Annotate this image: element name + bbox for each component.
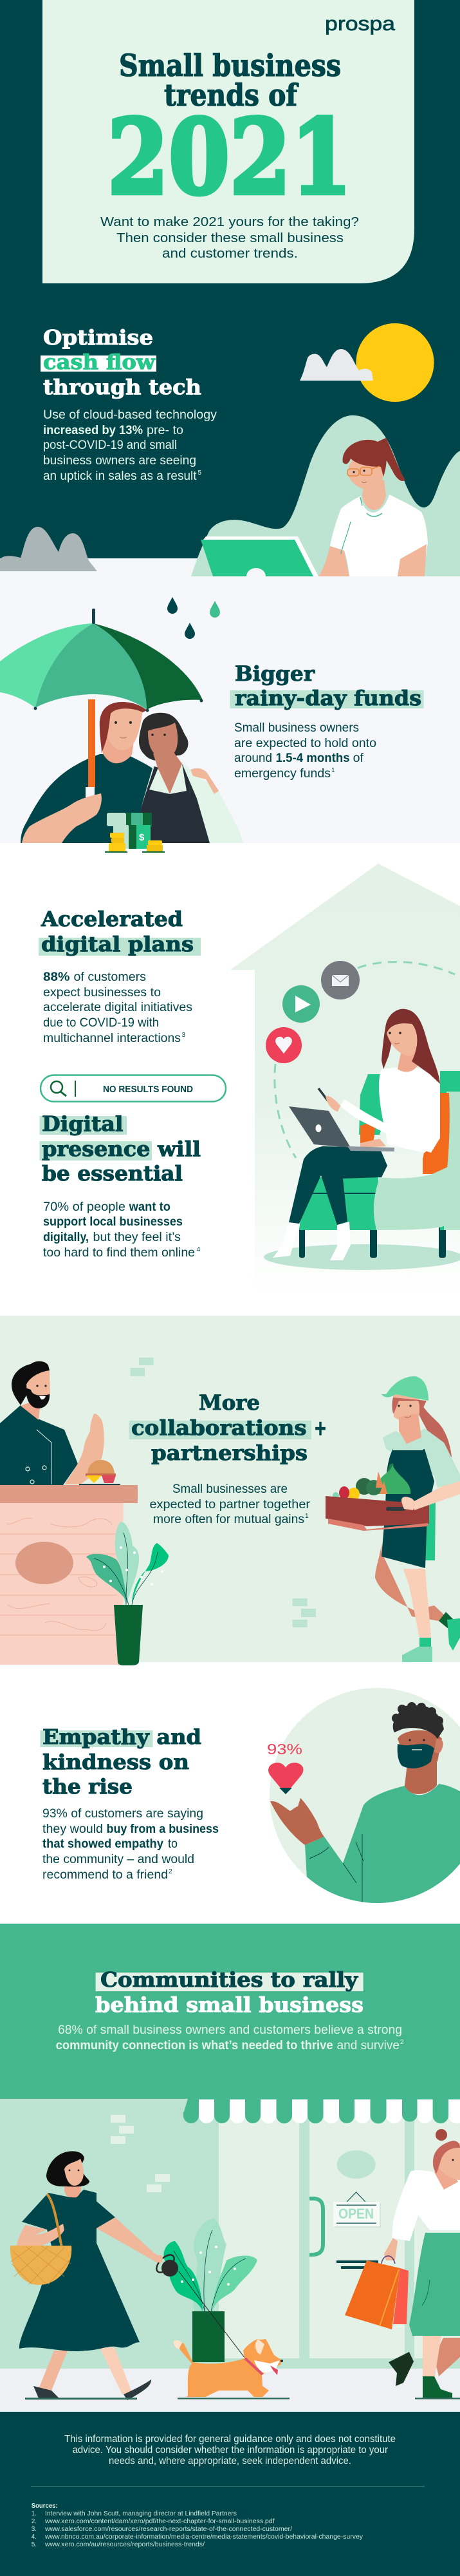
disclaimer: This information is provided for general guidance only and does not constitute: [64, 2434, 396, 2445]
floor: [0, 558, 199, 576]
heading: behind small business: [95, 1993, 363, 2017]
illustration: counter: [0, 1485, 138, 1665]
heading: accelerated digital plans: [39, 907, 201, 956]
illustration: woman on armchair: [264, 1009, 460, 1270]
heading: accelerated digital plans: Accelerated: [41, 907, 183, 931]
panel: empathy: [40, 1688, 460, 1913]
logo: prospa: prospa: [325, 12, 396, 35]
body text: an uptick in sales as a result: [43, 469, 197, 483]
decorative bricks: [111, 2115, 170, 2192]
sources: 3.: [32, 2526, 37, 2533]
body text: 70%: 4: [197, 1246, 201, 1253]
body text: 5: [198, 469, 202, 477]
body text: business owners are seeing: [43, 454, 196, 468]
panel: hero: [0, 0, 460, 576]
panel: digital plans: [39, 864, 460, 1294]
body text: and survive: [337, 2039, 400, 2052]
illustration: umbrella and couple: [0, 609, 243, 853]
sign: open: OPEN: [338, 2206, 374, 2222]
body text: 68% of small business owners and customers believe a strong: [58, 2023, 402, 2037]
heading: Bigger: [235, 661, 315, 686]
heading: More: [199, 1390, 260, 1415]
stat: 93%: 93%: [267, 1741, 302, 1757]
body text: 1: [331, 767, 335, 774]
body text: around: [234, 752, 272, 765]
body text: 1.5-4 months: [276, 752, 350, 765]
body text: emergency funds: [234, 767, 331, 781]
heading: collaborations: [131, 1416, 306, 1440]
sources: www.nbnco.com.au/corporate-information/media-centre/media-statements/covid-behavioral-change-survey: [44, 2533, 363, 2541]
illustration: pot plant: [86, 1522, 169, 1665]
body text: 88%: expect businesses to: [43, 986, 161, 999]
body text: community connection is what’s needed to thrive: [56, 2039, 333, 2052]
heading: cash flow: [43, 350, 156, 374]
panel: communities: [0, 1924, 460, 2099]
body text: the community – and would: [42, 1853, 194, 1866]
heading: digital presence: [40, 1112, 201, 1186]
panel: collaborations: [0, 1316, 460, 1665]
body text: 88%: multichannel interactions: [43, 1032, 181, 1045]
sources: Interview with John Scutt, managing director at Lindfield Partners: [45, 2510, 237, 2517]
body text: [234, 721, 376, 781]
body text: they would: [42, 1823, 103, 1836]
icon: play: [282, 985, 320, 1023]
body text: buy from a business: [107, 1823, 219, 1836]
rain drops: [167, 597, 220, 639]
panel: cash flow: [0, 323, 460, 585]
house shape: [230, 864, 460, 1294]
body text: 70%: support local businesses: [43, 1215, 183, 1229]
illustration: woman walking dog: [10, 2151, 290, 2400]
body text: pre- to: [147, 424, 183, 437]
body text: post-COVID-19 and small: [43, 439, 177, 452]
disclaimer: [64, 2434, 396, 2467]
heading: Empathy and: [42, 1725, 201, 1749]
year: 2021: 2021: [107, 97, 352, 218]
door panels: [219, 2112, 460, 2358]
body text: 70%: but they feel it’s: [93, 1231, 181, 1244]
body text: 88%: [43, 971, 192, 1045]
illustration: chef: [0, 1361, 120, 1486]
sources: 1.: [32, 2510, 37, 2517]
icon: heart with tip: [268, 1763, 304, 1794]
intro text: Then consider these small business: [116, 231, 344, 245]
heading: digital presence: presence will: [42, 1137, 201, 1161]
door details: [309, 2150, 378, 2269]
heading: accelerated digital plans: digital plans: [41, 932, 194, 956]
heading: rainy-day funds: [235, 686, 421, 710]
heading: through tech: [43, 375, 201, 399]
body text: that showed empathy: [42, 1837, 163, 1851]
icon: heart: [266, 1027, 302, 1063]
body text: 70%: digitally,: [43, 1231, 89, 1244]
intro text: and customer trends.: [162, 246, 298, 261]
body text: 70%: 70% of people: [43, 1200, 125, 1214]
heading: Communities to rally: [100, 1967, 358, 1992]
sources: 2.: [32, 2518, 37, 2525]
body text: Small businesses are: [172, 1482, 288, 1496]
heading: [95, 1967, 363, 2017]
title: Small business: [119, 48, 341, 84]
title: trends of: [164, 78, 299, 113]
body text: expected to partner together: [149, 1498, 311, 1511]
intro text: Want to make 2021 yours for the taking?: [100, 214, 359, 229]
heading: +: [314, 1416, 327, 1440]
panel: footer: [0, 2412, 460, 2576]
sources: www.salesforce.com/resources/research-reports/state-of-the-connected-customer/: [44, 2526, 292, 2533]
body text: 88%: of customers: [73, 971, 146, 984]
sources: 5.: [32, 2541, 37, 2548]
illustration: woman with laptop: [201, 438, 428, 585]
sources: 4.: [32, 2533, 37, 2541]
decorative bricks: [130, 1358, 316, 1627]
panel: rainy-day funds: [0, 576, 460, 853]
illustration: umbrella and couple: $: [139, 832, 145, 843]
body text: 70%: [43, 1200, 201, 1260]
body text: to: [168, 1837, 178, 1851]
icon: mail: [321, 961, 360, 999]
body text: [43, 408, 217, 483]
heading: partnerships: [151, 1441, 308, 1465]
heading: kindness on: [42, 1750, 189, 1774]
awning: [183, 2099, 460, 2123]
heading: the rise: [42, 1774, 133, 1799]
search bar: [41, 1075, 226, 1101]
body text: 70%: want to: [129, 1200, 170, 1214]
body text: 88%: 88%: [43, 971, 70, 984]
heading: [129, 1390, 327, 1465]
disclaimer: needs and, where appropriate, seek independent advice.: [109, 2456, 351, 2467]
illustration: planter: [163, 2219, 257, 2362]
body text: 93% of customers are saying: [42, 1807, 203, 1821]
body text: [56, 2023, 404, 2052]
sources: www.xero.com/au/resources/reports/business-trends/: [44, 2541, 205, 2548]
white cloud: [300, 349, 373, 381]
body text: 2: [400, 2039, 404, 2046]
hero card: [42, 0, 414, 283]
body text: [149, 1482, 311, 1526]
body text: Use of cloud-based technology: [43, 408, 217, 422]
search bar: NO RESULTS FOUND: [103, 1084, 193, 1095]
heading: [230, 661, 423, 710]
heading: [41, 325, 201, 399]
circle background: [270, 1688, 460, 1903]
body text: 88%: accelerate digital initiatives: [43, 1001, 192, 1014]
body text: 70%: too hard to find them online: [43, 1246, 195, 1260]
body text: are expected to hold onto: [234, 737, 376, 750]
panel: storefront: [0, 2099, 460, 2412]
illustration: masked man: [270, 1702, 460, 1913]
heading: digital presence: be essential: [42, 1161, 183, 1186]
heading: [40, 1725, 201, 1799]
sign: open: [333, 2192, 381, 2228]
heading: digital presence: Digital: [42, 1112, 124, 1136]
sun: [356, 323, 434, 402]
body text: 88%: 3: [181, 1032, 185, 1039]
disclaimer: advice. You should consider whether the information is appropriate to your: [73, 2445, 388, 2456]
intro text: [100, 214, 359, 261]
sources: [32, 2503, 363, 2548]
sources: Sources:: [32, 2503, 58, 2510]
body text: increased by 13%: [43, 424, 143, 437]
body text: of: [353, 752, 364, 765]
body text: 88%: due to COVID-19 with: [43, 1016, 159, 1030]
mint hills: [191, 415, 460, 576]
illustration: vendor with crate: [326, 1376, 460, 1662]
dashed arc: [275, 962, 455, 1158]
title: [119, 48, 341, 113]
body text: recommend to a friend: [42, 1868, 168, 1882]
body text: [42, 1807, 219, 1882]
sources: www.xero.com/content/dam/xero/pdf/the-next-chapter-for-small-business.pdf: [44, 2518, 275, 2525]
body text: 1: [305, 1513, 309, 1520]
grey cloud: [0, 527, 97, 571]
heading: Optimise: [43, 325, 153, 350]
body text: Small business owners: [234, 721, 359, 735]
body text: 2: [169, 1868, 172, 1875]
body text: more often for mutual gains: [153, 1513, 304, 1526]
illustration: shopper with bags: [345, 2129, 460, 2400]
